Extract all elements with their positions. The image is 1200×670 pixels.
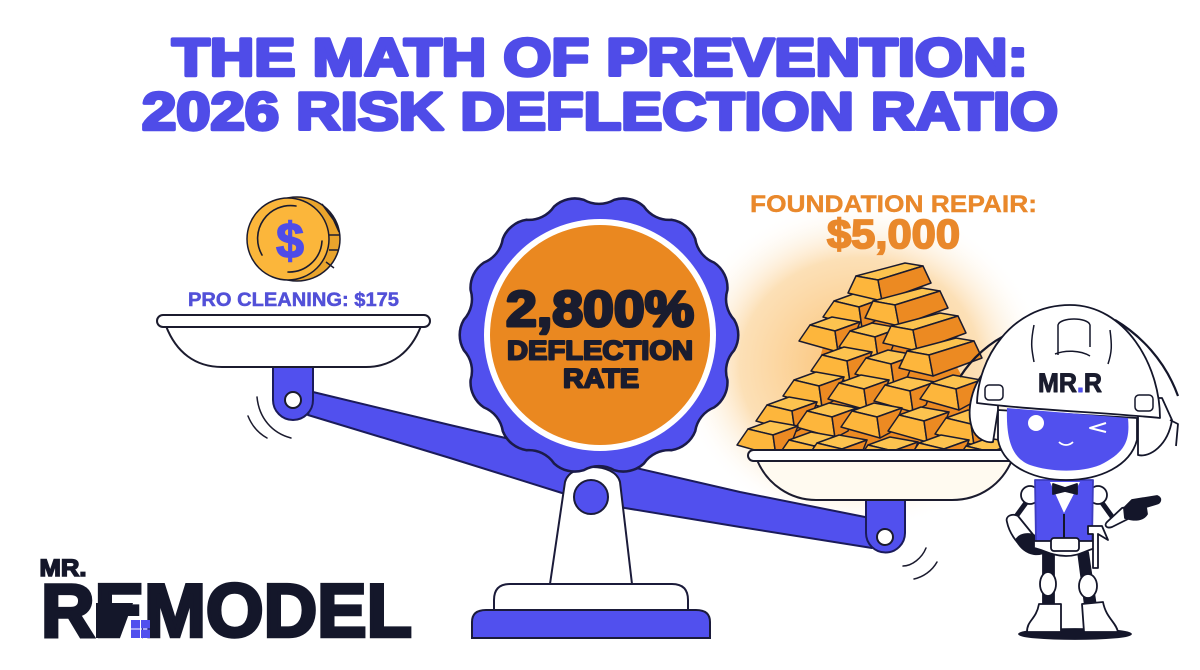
right motion arcs xyxy=(903,548,937,579)
icon: gold coin: $ xyxy=(276,213,304,269)
deflection badge xyxy=(460,198,738,472)
logo window icon xyxy=(96,603,150,642)
logo small word: MR. xyxy=(40,555,86,582)
robot mascot xyxy=(960,305,1178,639)
left pan xyxy=(157,315,430,420)
robot left arm xyxy=(1007,486,1048,554)
robot shadow xyxy=(1019,629,1131,639)
robot bow tie xyxy=(1053,484,1077,494)
robot head xyxy=(998,410,1137,480)
robot face screen xyxy=(1007,408,1128,471)
robot shirt collar xyxy=(1050,482,1080,513)
robot tool belt xyxy=(1034,541,1096,556)
label: foundation repair: $5,000 xyxy=(827,211,960,257)
glow behind gold pile xyxy=(675,200,1045,530)
gold bar pile xyxy=(736,262,1000,450)
robot ear muffs xyxy=(960,320,1178,455)
logo main word: REMODEL xyxy=(41,568,412,652)
stand base xyxy=(472,584,710,638)
robot hard hat xyxy=(977,305,1160,418)
icon: gold coin xyxy=(247,197,340,281)
hat label: MR.R xyxy=(1038,368,1102,398)
scale beam xyxy=(308,392,872,548)
robot right arm xyxy=(1089,486,1160,528)
robot hammer xyxy=(1088,526,1108,568)
robot boots xyxy=(1027,602,1118,632)
robot eyes and smile xyxy=(1028,415,1106,445)
right pan xyxy=(748,450,1018,552)
title: THE MATH OF PREVENTION: xyxy=(172,28,1028,87)
deflection badge: RATE xyxy=(563,364,639,394)
deflection badge: DEFLECTION xyxy=(507,336,693,366)
scale stand post xyxy=(550,467,632,584)
title xyxy=(142,28,1058,141)
left motion arcs xyxy=(248,397,291,438)
deflection badge: 2,800% xyxy=(506,281,694,337)
label: pro cleaning: PRO CLEANING: $175 xyxy=(188,289,399,311)
label: foundation repair xyxy=(750,191,1037,257)
robot knees xyxy=(1040,572,1097,598)
robot legs xyxy=(1043,552,1096,606)
stand pivot xyxy=(574,480,608,514)
robot safety vest xyxy=(1035,480,1093,542)
logo xyxy=(40,555,412,652)
label: foundation repair: FOUNDATION REPAIR: xyxy=(750,191,1037,218)
title: 2026 RISK DEFLECTION RATIO xyxy=(142,82,1058,141)
